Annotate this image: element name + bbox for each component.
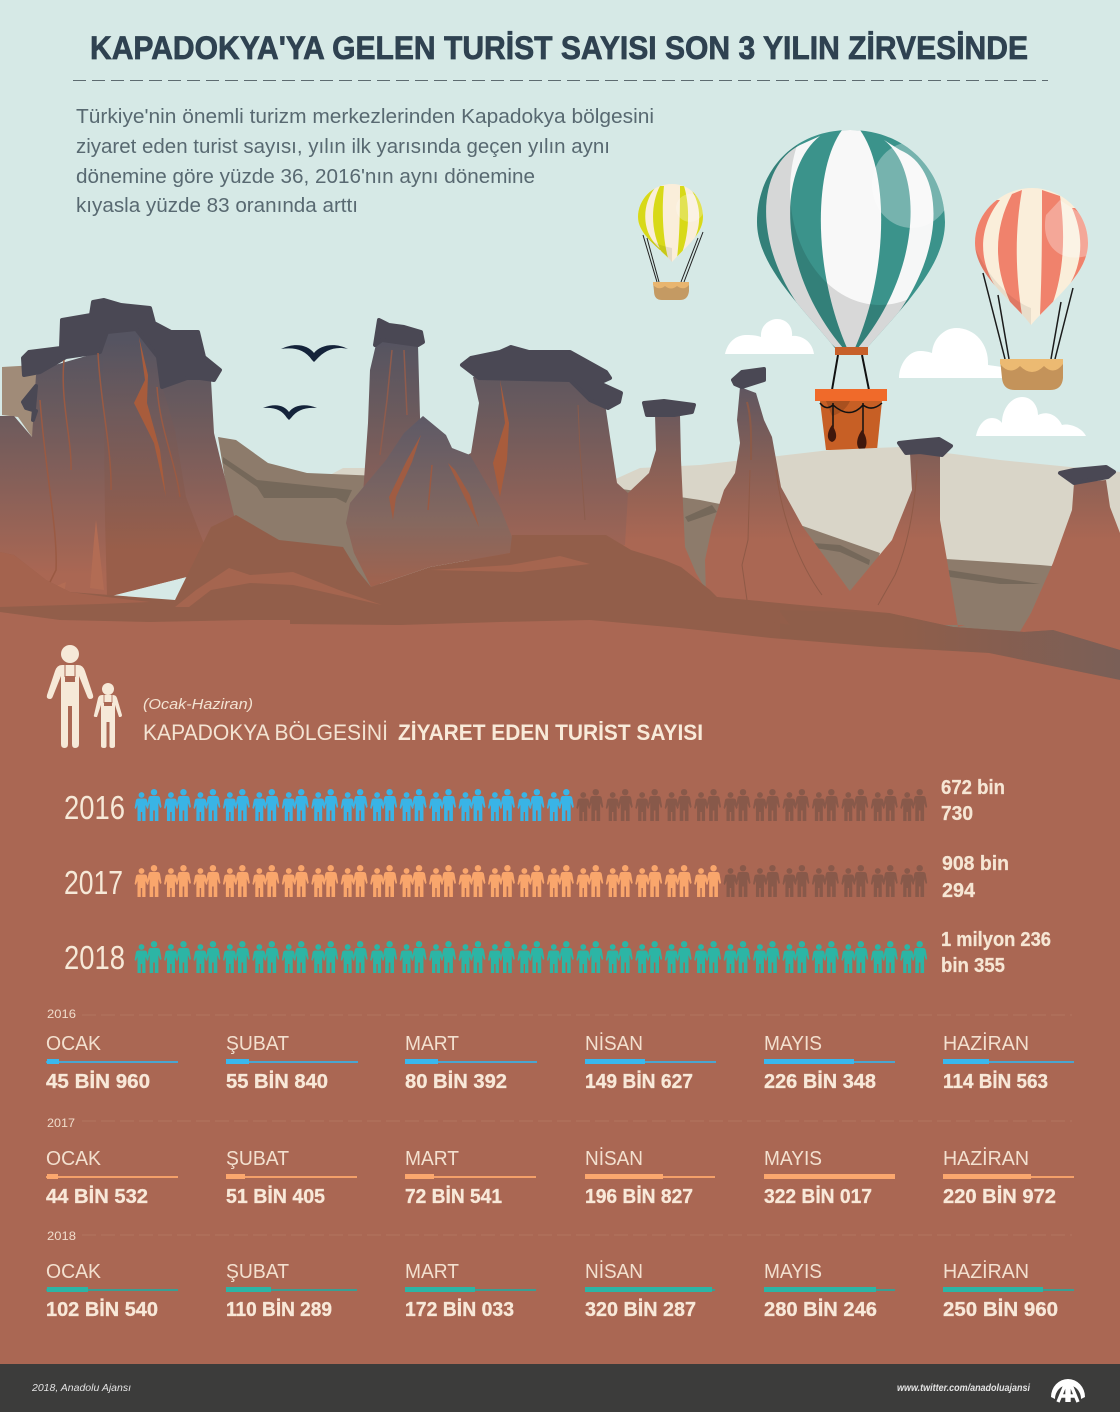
big mushroom rock (430, 347, 628, 560)
monthly breakdown: 2016: 226 BİN 348 (764, 1070, 876, 1093)
pictogram row: 2017: 2017 (64, 864, 123, 901)
chimney 3 (705, 369, 870, 610)
balloon: right coral (975, 188, 1088, 390)
monthly breakdown: 2018: 250 BİN 960 (943, 1298, 1058, 1321)
monthly breakdown: 2017: 220 BİN 972 (943, 1185, 1056, 1208)
monthly breakdown: 2016: HAZİRAN (943, 1032, 1029, 1055)
monthly breakdown: 2016: 55 BİN 840 (226, 1070, 328, 1093)
monthly breakdown: 2018: 320 BİN 287 (585, 1298, 696, 1321)
monthly breakdown: 2016: NİSAN (585, 1032, 643, 1055)
pictogram row: 2016: 2016 (64, 789, 125, 826)
pictogram row: 2018: bin 355 (941, 955, 1005, 977)
monthly breakdown: 2016: OCAK (46, 1033, 102, 1055)
monthly breakdown: 2018: OCAK (46, 1261, 102, 1283)
footer bar: www.twitter.com/anadoluajansi (897, 1382, 1031, 1394)
intro text block: ziyaret eden turist sayısı, yılın ilk yarısında geçen yılın aynı (76, 136, 610, 158)
left massif (0, 300, 240, 600)
sky background (0, 0, 1120, 660)
monthly breakdown: 2017: OCAK (46, 1148, 102, 1170)
intro text block (76, 106, 654, 217)
pictogram row: 2016: 672 bin (941, 777, 1005, 799)
monthly breakdown: 2017: MART (405, 1148, 459, 1170)
pictogram row: 2018: 1 milyon 236 (941, 929, 1051, 951)
landscape: rock formations (0, 300, 1120, 670)
icon: adult and child tourists (47, 645, 122, 748)
balloon: large teal (757, 130, 945, 450)
intro text block: kıyasla yüzde 83 oranında arttı (76, 195, 358, 217)
intro text block: dönemine göre yüzde 36, 2016'nın aynı dönemine (76, 166, 535, 188)
monthly breakdown: 2017: MAYIS (764, 1148, 822, 1170)
monthly breakdown: 2016: MAYIS (764, 1033, 822, 1055)
footer bar: 2018, Anadolu Ajansı (31, 1382, 131, 1394)
monthly breakdown: 2017: 196 BİN 827 (585, 1185, 693, 1208)
landscape: foreground hills (0, 515, 1120, 1365)
monthly breakdown: 2016: ŞUBAT (226, 1033, 289, 1055)
monthly breakdown: 2016: 149 BİN 627 (585, 1070, 693, 1093)
monthly breakdown: 2018: 2018 (47, 1229, 76, 1243)
tall chimney (360, 320, 423, 530)
monthly breakdown: 2017: 72 BİN 541 (405, 1185, 502, 1208)
pictogram row: 2018 (64, 929, 1051, 977)
monthly breakdown: 2018 (46, 1229, 1074, 1321)
monthly breakdown: 2016: MART (405, 1033, 459, 1055)
monthly breakdown: 2017: 44 BİN 532 (46, 1185, 148, 1208)
balloon: small yellow (638, 184, 704, 300)
chimney 2 (610, 401, 706, 600)
chimney 5 (1015, 467, 1120, 670)
monthly breakdown: 2017: 2017 (47, 1116, 75, 1130)
monthly breakdown: 2018: 172 BİN 033 (405, 1298, 514, 1321)
pictogram row: 2018: 2018 (64, 939, 125, 976)
monthly breakdown: 2018: HAZİRAN (943, 1260, 1029, 1283)
pictogram row: 2016: 730 (941, 803, 973, 825)
icon: agency logo (1051, 1379, 1085, 1402)
title: KAPADOKYA'YA GELEN TURİST SAYISI SON 3 YILIN ZİRVESİNDE (90, 30, 1028, 66)
monthly breakdown: 2017: NİSAN (585, 1147, 643, 1170)
monthly breakdown: 2016: 80 BİN 392 (405, 1070, 507, 1093)
section heading: KAPADOKYA BÖLGESİNİ (143, 720, 388, 745)
monthly breakdown: 2018: MART (405, 1261, 459, 1283)
pictogram row: 2017: 294 (942, 880, 976, 902)
monthly breakdown: 2016: 45 BİN 960 (46, 1070, 150, 1093)
section heading (143, 696, 703, 745)
monthly breakdown: 2016 (46, 1007, 1074, 1093)
section heading: ZİYARET EDEN TURİST SAYISI (398, 720, 703, 745)
pictogram row: 2017: 908 bin (942, 853, 1009, 875)
monthly breakdown: 2018: NİSAN (585, 1260, 643, 1283)
monthly breakdown: 2017 (46, 1116, 1074, 1208)
monthly breakdown: 2017: ŞUBAT (226, 1148, 289, 1170)
intro text block: Türkiye'nin önemli turizm merkezlerinden Kapadokya bölgesini (76, 106, 654, 128)
monthly breakdown: 2018: 102 BİN 540 (46, 1298, 158, 1321)
monthly breakdown: 2018: 110 BİN 289 (226, 1298, 332, 1321)
birds (263, 345, 348, 420)
pictogram row: 2016 (64, 777, 1005, 826)
monthly breakdown: 2016: 114 BİN 563 (943, 1070, 1048, 1093)
monthly breakdown: 2018: MAYIS (764, 1261, 822, 1283)
clouds (725, 319, 1086, 436)
chimney 4 (820, 439, 965, 627)
monthly breakdown: 2018: 280 BİN 246 (764, 1298, 877, 1321)
monthly breakdown: 2017: 322 BİN 017 (764, 1185, 872, 1208)
monthly breakdown: 2016: 2016 (47, 1007, 76, 1021)
footer bar (0, 1364, 1120, 1412)
monthly breakdown: 2017: HAZİRAN (943, 1147, 1029, 1170)
section heading: (Ocak-Haziran) (143, 696, 253, 713)
monthly breakdown: 2018: ŞUBAT (226, 1261, 289, 1283)
pictogram row: 2017 (64, 853, 1009, 902)
monthly breakdown: 2017: 51 BİN 405 (226, 1185, 325, 1208)
triangular rock (346, 416, 512, 587)
